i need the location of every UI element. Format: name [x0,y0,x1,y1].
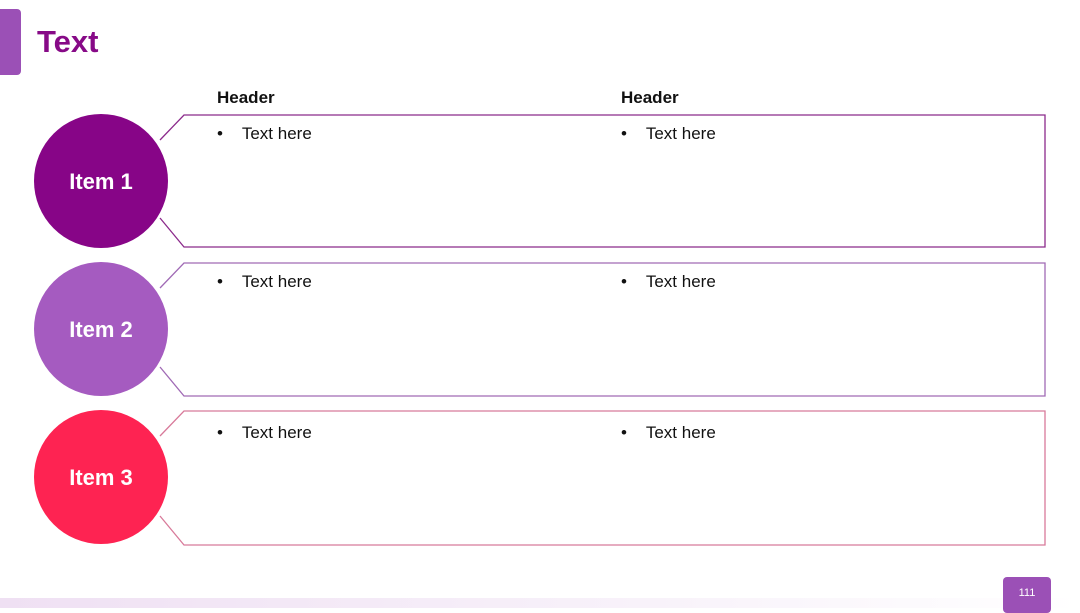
bullets row 2: • Text here [217,272,312,291]
title tab [0,9,21,75]
box 2: Item 2 [69,317,133,342]
bottom gradient strip [0,598,1080,608]
box 1 [34,114,1045,248]
title: Text [37,24,98,59]
page number: 111 [1019,587,1035,599]
headers: Header [217,88,275,107]
box 3: Item 3 [69,465,133,490]
box 3 [34,410,1045,545]
bullets row 2: • Text here [621,272,716,291]
bullets row 2 [217,272,716,291]
box 1: Item 1 [69,169,133,194]
bullets row 3: • Text here [621,423,716,442]
bullets row 3: • Text here [217,423,312,442]
box 2 [34,262,1045,396]
headers [217,88,679,107]
bullets row 1: • Text here [621,124,716,143]
page number [1003,577,1051,613]
bullets row 3 [217,423,716,442]
bullets row 1 [217,124,716,143]
headers: Header [621,88,679,107]
bullets row 1: • Text here [217,124,312,143]
